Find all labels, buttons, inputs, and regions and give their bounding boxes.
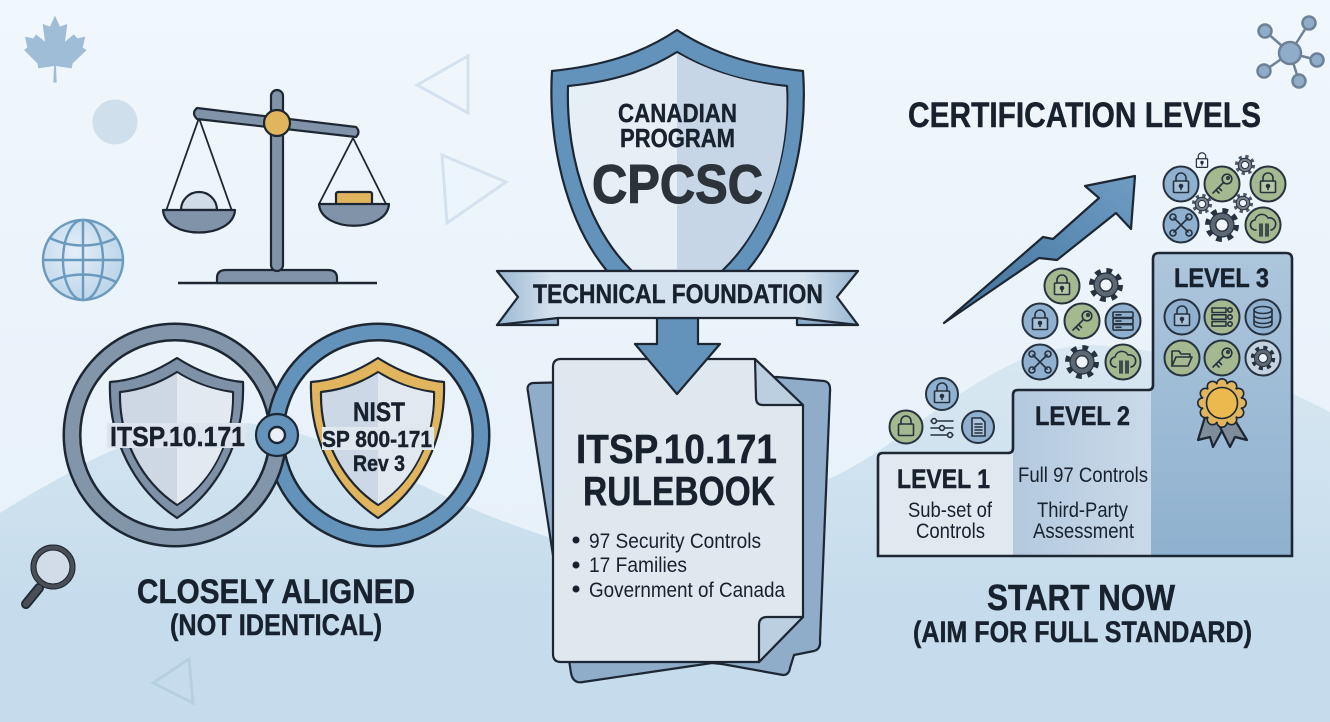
heading: certification levels: CERTIFICATION LEVELS [908, 96, 1261, 135]
subheading: not identical: (NOT IDENTICAL) [170, 609, 382, 642]
icons: level 3 inside [1164, 300, 1280, 376]
rulebook title [576, 426, 777, 514]
document: rulebook page [553, 359, 803, 662]
rulebook list: Government of Canada [589, 579, 785, 602]
arrow: growth [944, 176, 1135, 323]
rulebook list [572, 530, 785, 602]
shield title: CANADIAN [618, 98, 737, 128]
background hills [0, 345, 1330, 722]
icon: magnifier [26, 545, 75, 604]
level 3 step [1151, 253, 1292, 556]
staircase outline [878, 253, 1292, 556]
subheading: aim for full standard: (AIM FOR FULL STANDARD) [913, 616, 1252, 649]
fold bottom [759, 617, 803, 662]
level 1 step [878, 453, 1013, 556]
level 2 step: Assessment [1033, 520, 1134, 543]
icons: level 1 [890, 378, 994, 444]
shield: ITSP.10.171: ITSP.10.171 [110, 421, 245, 452]
level 1 step: LEVEL 1 [897, 464, 990, 494]
shield: CPCSC [551, 30, 804, 271]
banner: technical foundation [497, 271, 858, 325]
rulebook list: 97 Security Controls [589, 530, 761, 553]
heading: closely aligned: CLOSELY ALIGNED [137, 573, 415, 611]
level 2 step [1013, 390, 1151, 556]
decorative triangle middle [442, 155, 506, 223]
heading: start now: START NOW [987, 577, 1175, 618]
left ring lower crossing [241, 444, 278, 514]
level 2 step: LEVEL 2 [1035, 401, 1130, 431]
banner: technical foundation: TECHNICAL FOUNDATION [533, 279, 823, 309]
shield: NIST: Rev 3 [353, 451, 405, 476]
shield: NIST: SP 800-171 [322, 426, 432, 452]
icons: level 2 [1022, 268, 1140, 380]
icons: level 3 above [1164, 153, 1286, 242]
icon: balance scale [163, 90, 389, 283]
shield: NIST: NIST [353, 397, 405, 427]
decorative triangle bottom [153, 659, 193, 703]
shield: ITSP.10.171 [107, 358, 247, 518]
chart: staircase levels [878, 253, 1292, 556]
rulebook title: RULEBOOK [583, 468, 775, 514]
rulebook list: 17 Families [589, 554, 687, 577]
icon: globe [43, 220, 123, 300]
shield title [592, 98, 763, 215]
left ring [72, 332, 278, 538]
ring link [256, 414, 298, 456]
level 2 step: Full 97 Controls [1018, 464, 1148, 487]
shield: NIST [311, 358, 444, 518]
rulebook title: ITSP.10.171 [576, 426, 777, 472]
arrow: shield to rulebook [635, 318, 720, 394]
level 1 step: Controls [916, 520, 985, 543]
panel: aligned rings [72, 332, 481, 538]
document stack: back pages [528, 377, 830, 682]
shield title: CPCSC [592, 153, 763, 215]
level 1 step: Sub-set of [908, 499, 992, 522]
level 3 step: LEVEL 3 [1174, 263, 1269, 293]
icon: network [1258, 16, 1324, 88]
shield title: PROGRAM [620, 123, 735, 153]
icon: maple leaf [24, 16, 87, 83]
decorative circle [92, 100, 138, 144]
icon: award badge [1198, 379, 1247, 447]
decorative triangle top [417, 56, 468, 113]
fold top [755, 359, 803, 405]
level 2 step: Third-Party [1037, 499, 1128, 522]
right ring [275, 332, 481, 538]
